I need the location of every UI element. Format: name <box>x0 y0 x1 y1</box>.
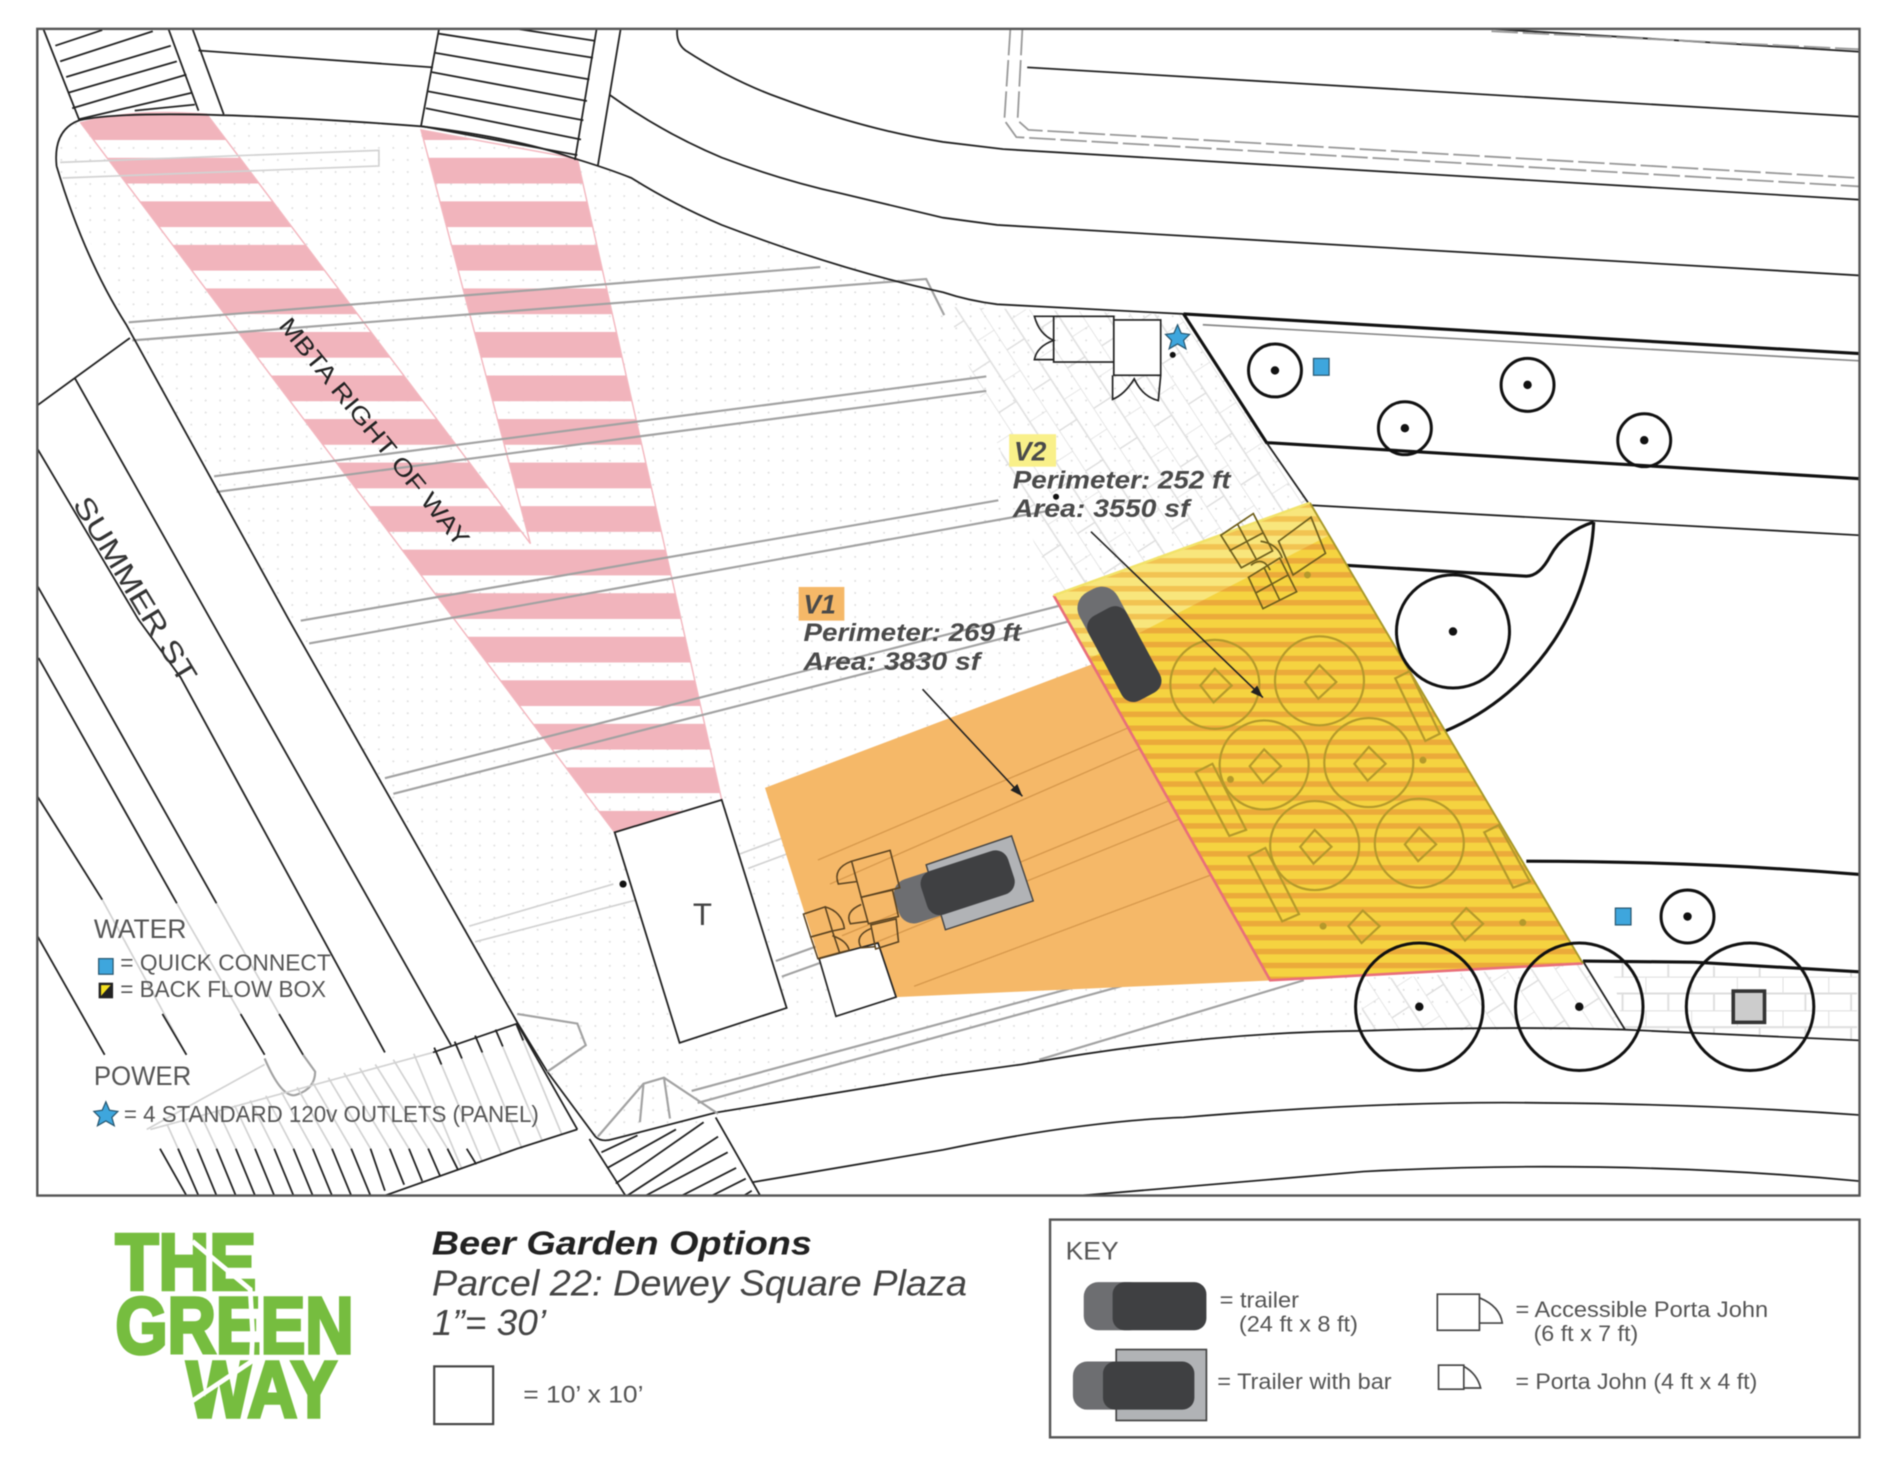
area: V1 option <box>765 662 1275 997</box>
key item: porta john <box>1439 1365 1757 1394</box>
building: T station <box>615 800 787 1043</box>
paving area north <box>947 307 1310 595</box>
street lines: Summer St <box>37 338 451 1129</box>
road and curb lines <box>56 28 1860 1196</box>
legend: water: WATER <box>94 914 186 944</box>
label: Summer St: SUMMER ST <box>66 491 203 689</box>
logo: The Greenway: THE <box>115 1217 256 1306</box>
V2 porta johns <box>1221 514 1325 609</box>
label: V2 details: Perimeter: 252 ft <box>1013 466 1232 494</box>
paving area south <box>1359 962 1857 1040</box>
scale legend <box>434 1366 644 1424</box>
legend: water: = QUICK CONNECT <box>120 950 331 976</box>
arrow: V1 pointer <box>923 689 1022 796</box>
crosswalk: top middle <box>421 29 621 166</box>
icon: water quick connect south <box>1615 908 1631 925</box>
hatched zone: MBTA right of way <box>81 112 722 832</box>
key item: trailer with bar <box>1073 1350 1392 1420</box>
key item: trailer <box>1084 1282 1358 1336</box>
north porta johns <box>1034 316 1161 401</box>
label: V2 details: V2 <box>1014 437 1047 467</box>
legend: water <box>94 914 331 1002</box>
key item: trailer: = trailer <box>1220 1287 1300 1312</box>
V1 trailer with bar <box>890 836 1033 930</box>
subtitle: parcel: Parcel 22: Dewey Square Plaza <box>432 1262 967 1303</box>
legend: power: = 4 STANDARD 120v OUTLETS (PANEL) <box>124 1101 539 1127</box>
icon: power panel star <box>1166 325 1190 349</box>
scale legend: = 10’ x 10’ <box>523 1381 644 1408</box>
panel: key <box>1050 1220 1860 1437</box>
title: Beer Garden Options: Beer Garden Options <box>432 1226 812 1263</box>
icon: water quick connect north <box>1313 358 1329 375</box>
label: V2 details: Area: 3550 sf <box>1012 495 1192 523</box>
label: V1 details <box>799 587 1023 676</box>
small square bay <box>819 943 896 1016</box>
area: V2 option <box>1054 503 1583 980</box>
label: MBTA right of way: MBTA RIGHT OF WAY <box>273 313 474 552</box>
arrow: V2 pointer <box>1091 532 1263 698</box>
logo: The Greenway: GREEN <box>115 1281 354 1370</box>
label: V2 details <box>1009 434 1232 523</box>
icon: backflow box at tree <box>1733 991 1765 1022</box>
plaza light track lines <box>60 150 1304 1103</box>
panel: site map <box>37 28 1860 1197</box>
key item: accessible porta john: (6 ft x 7 ft) <box>1534 1321 1638 1346</box>
label: V1 details: Perimeter: 269 ft <box>803 619 1023 647</box>
trees <box>1053 344 1814 1070</box>
key item: porta john: = Porta John (4 ft x 4 ft) <box>1516 1369 1757 1394</box>
building: T station: T <box>693 897 712 932</box>
label: V1 details: Area: 3830 sf <box>802 648 983 676</box>
crosswalk: bottom middle <box>517 1014 760 1197</box>
V2 trailer <box>1076 586 1162 703</box>
key item: accessible porta john <box>1437 1294 1768 1346</box>
logo: The Greenway <box>115 1217 354 1434</box>
crosswalk: top left <box>43 29 224 120</box>
panel: key: KEY <box>1066 1237 1119 1265</box>
label: V1 details: V1 <box>803 589 836 619</box>
legend: water: = BACK FLOW BOX <box>120 976 326 1002</box>
map frame <box>37 29 1860 1196</box>
logo: The Greenway: WAY <box>186 1345 337 1434</box>
legend: power <box>94 1061 539 1127</box>
V2 trees and planters <box>1170 573 1530 943</box>
crosswalk: bottom left <box>150 1024 577 1196</box>
subtitle: scale: 1”= 30’ <box>432 1302 547 1343</box>
legend: power: POWER <box>94 1061 191 1091</box>
key item: accessible porta john: = Accessible Porta John <box>1516 1297 1768 1322</box>
key item: trailer: (24 ft x 8 ft) <box>1239 1311 1358 1336</box>
V1 porta johns <box>803 850 900 959</box>
plaza dot texture <box>56 114 1583 1140</box>
key item: trailer with bar: = Trailer with bar <box>1217 1369 1392 1394</box>
